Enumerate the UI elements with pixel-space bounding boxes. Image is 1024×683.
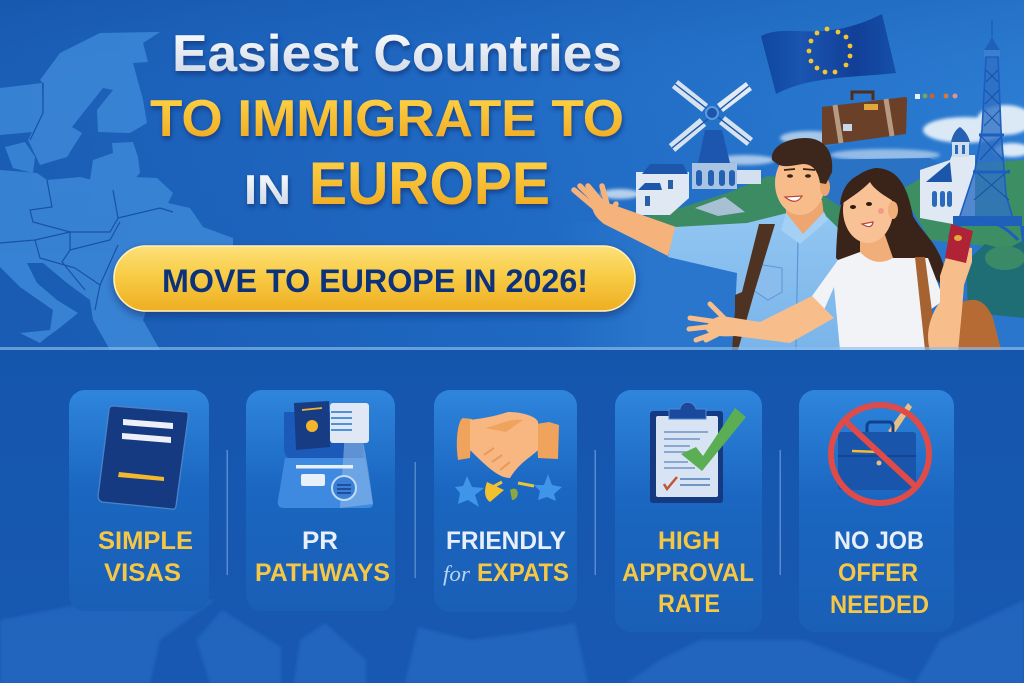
mainland [0,170,233,350]
extended arm and hand [689,296,834,343]
background: upper hero panel [0,0,1024,352]
windmill tower [698,130,730,163]
divider [226,450,228,575]
raised arm and hand [574,186,676,256]
title: three lines [150,25,624,217]
Scandinavia [28,32,160,165]
label: APPROVAL [622,559,754,587]
hair [772,138,832,184]
label: PATHWAYS [255,559,390,587]
shirt pocket [753,264,782,300]
label: for [443,561,470,586]
background: lower panel [0,347,1024,683]
panel: simple visas [69,390,209,611]
illustration: man [574,138,845,350]
neck [786,200,824,236]
bunting flags [915,94,958,99]
call-to-action button [114,246,635,311]
divider [780,450,781,575]
panel: friendly for expats [434,390,577,612]
face details [850,202,884,227]
label: VISAS [104,559,181,587]
green island left [632,176,860,232]
icon: Eiffel tower [950,20,1024,242]
label: RATE [658,590,720,618]
backpack [945,300,1001,350]
label [830,527,929,619]
icon: windmill and houses [636,84,761,216]
clouds [600,105,1024,199]
long hair [836,168,948,292]
icon: white church [920,127,975,225]
call-to-action button: MOVE TO EUROPE IN 2026! [162,263,588,299]
stone steps [695,197,745,216]
panel: PR pathways [246,390,395,611]
backpack strap [732,224,775,350]
map of Europe, left side [0,32,233,350]
label: EXPATS [477,559,569,587]
passport in hand [945,224,973,263]
Denmark [5,142,35,173]
title line 3: EUROPE [309,150,550,217]
label [622,527,754,618]
hair fringe [840,172,900,205]
scenery: sky, clouds, water and islands [560,105,1024,350]
divider [594,450,596,575]
neck [860,235,893,262]
label [443,527,569,587]
label: FRIENDLY [446,527,566,555]
panel: no job offer needed [799,390,954,632]
icon: PR document and passport [278,401,373,508]
raised arm and hand [928,245,972,352]
head [843,177,893,243]
icon: suitcase [822,92,907,145]
Baltics [90,142,140,185]
title line 2: TO IMMIGRATE TO [150,90,624,148]
icon: crossed-out briefcase [831,403,929,503]
icon: visa document [98,406,188,509]
title line 3: IN [244,166,291,213]
green hill right [900,160,1024,250]
white t-shirt [812,252,944,350]
icon: clipboard with check [650,402,746,503]
label [255,527,390,587]
label: SIMPLE [98,527,193,555]
stars and ribbon [455,476,484,507]
label: NEEDED [830,591,929,619]
icon: handshake [455,412,562,507]
shirt [668,213,845,350]
label: OFFER [838,559,918,587]
collar [781,212,828,244]
shoulder strap [915,257,937,350]
face details [784,169,815,201]
illustration: woman [689,168,1001,352]
label: NO JOB [834,527,924,555]
trees lower right [966,240,1024,318]
Britain [0,83,43,135]
panel: high approval rate [615,390,762,632]
map borders [0,83,173,310]
label [98,527,193,587]
icon: EU flag [761,14,896,94]
title line 1: Easiest Countries [172,25,622,83]
distant sea band [800,158,960,215]
faint lower map [0,600,1024,683]
label: PR [302,527,338,555]
divider [414,462,416,578]
label: HIGH [658,527,720,555]
head [775,151,825,215]
windmill sails [672,84,750,148]
shirt placket [796,238,798,350]
white house left [636,172,689,215]
